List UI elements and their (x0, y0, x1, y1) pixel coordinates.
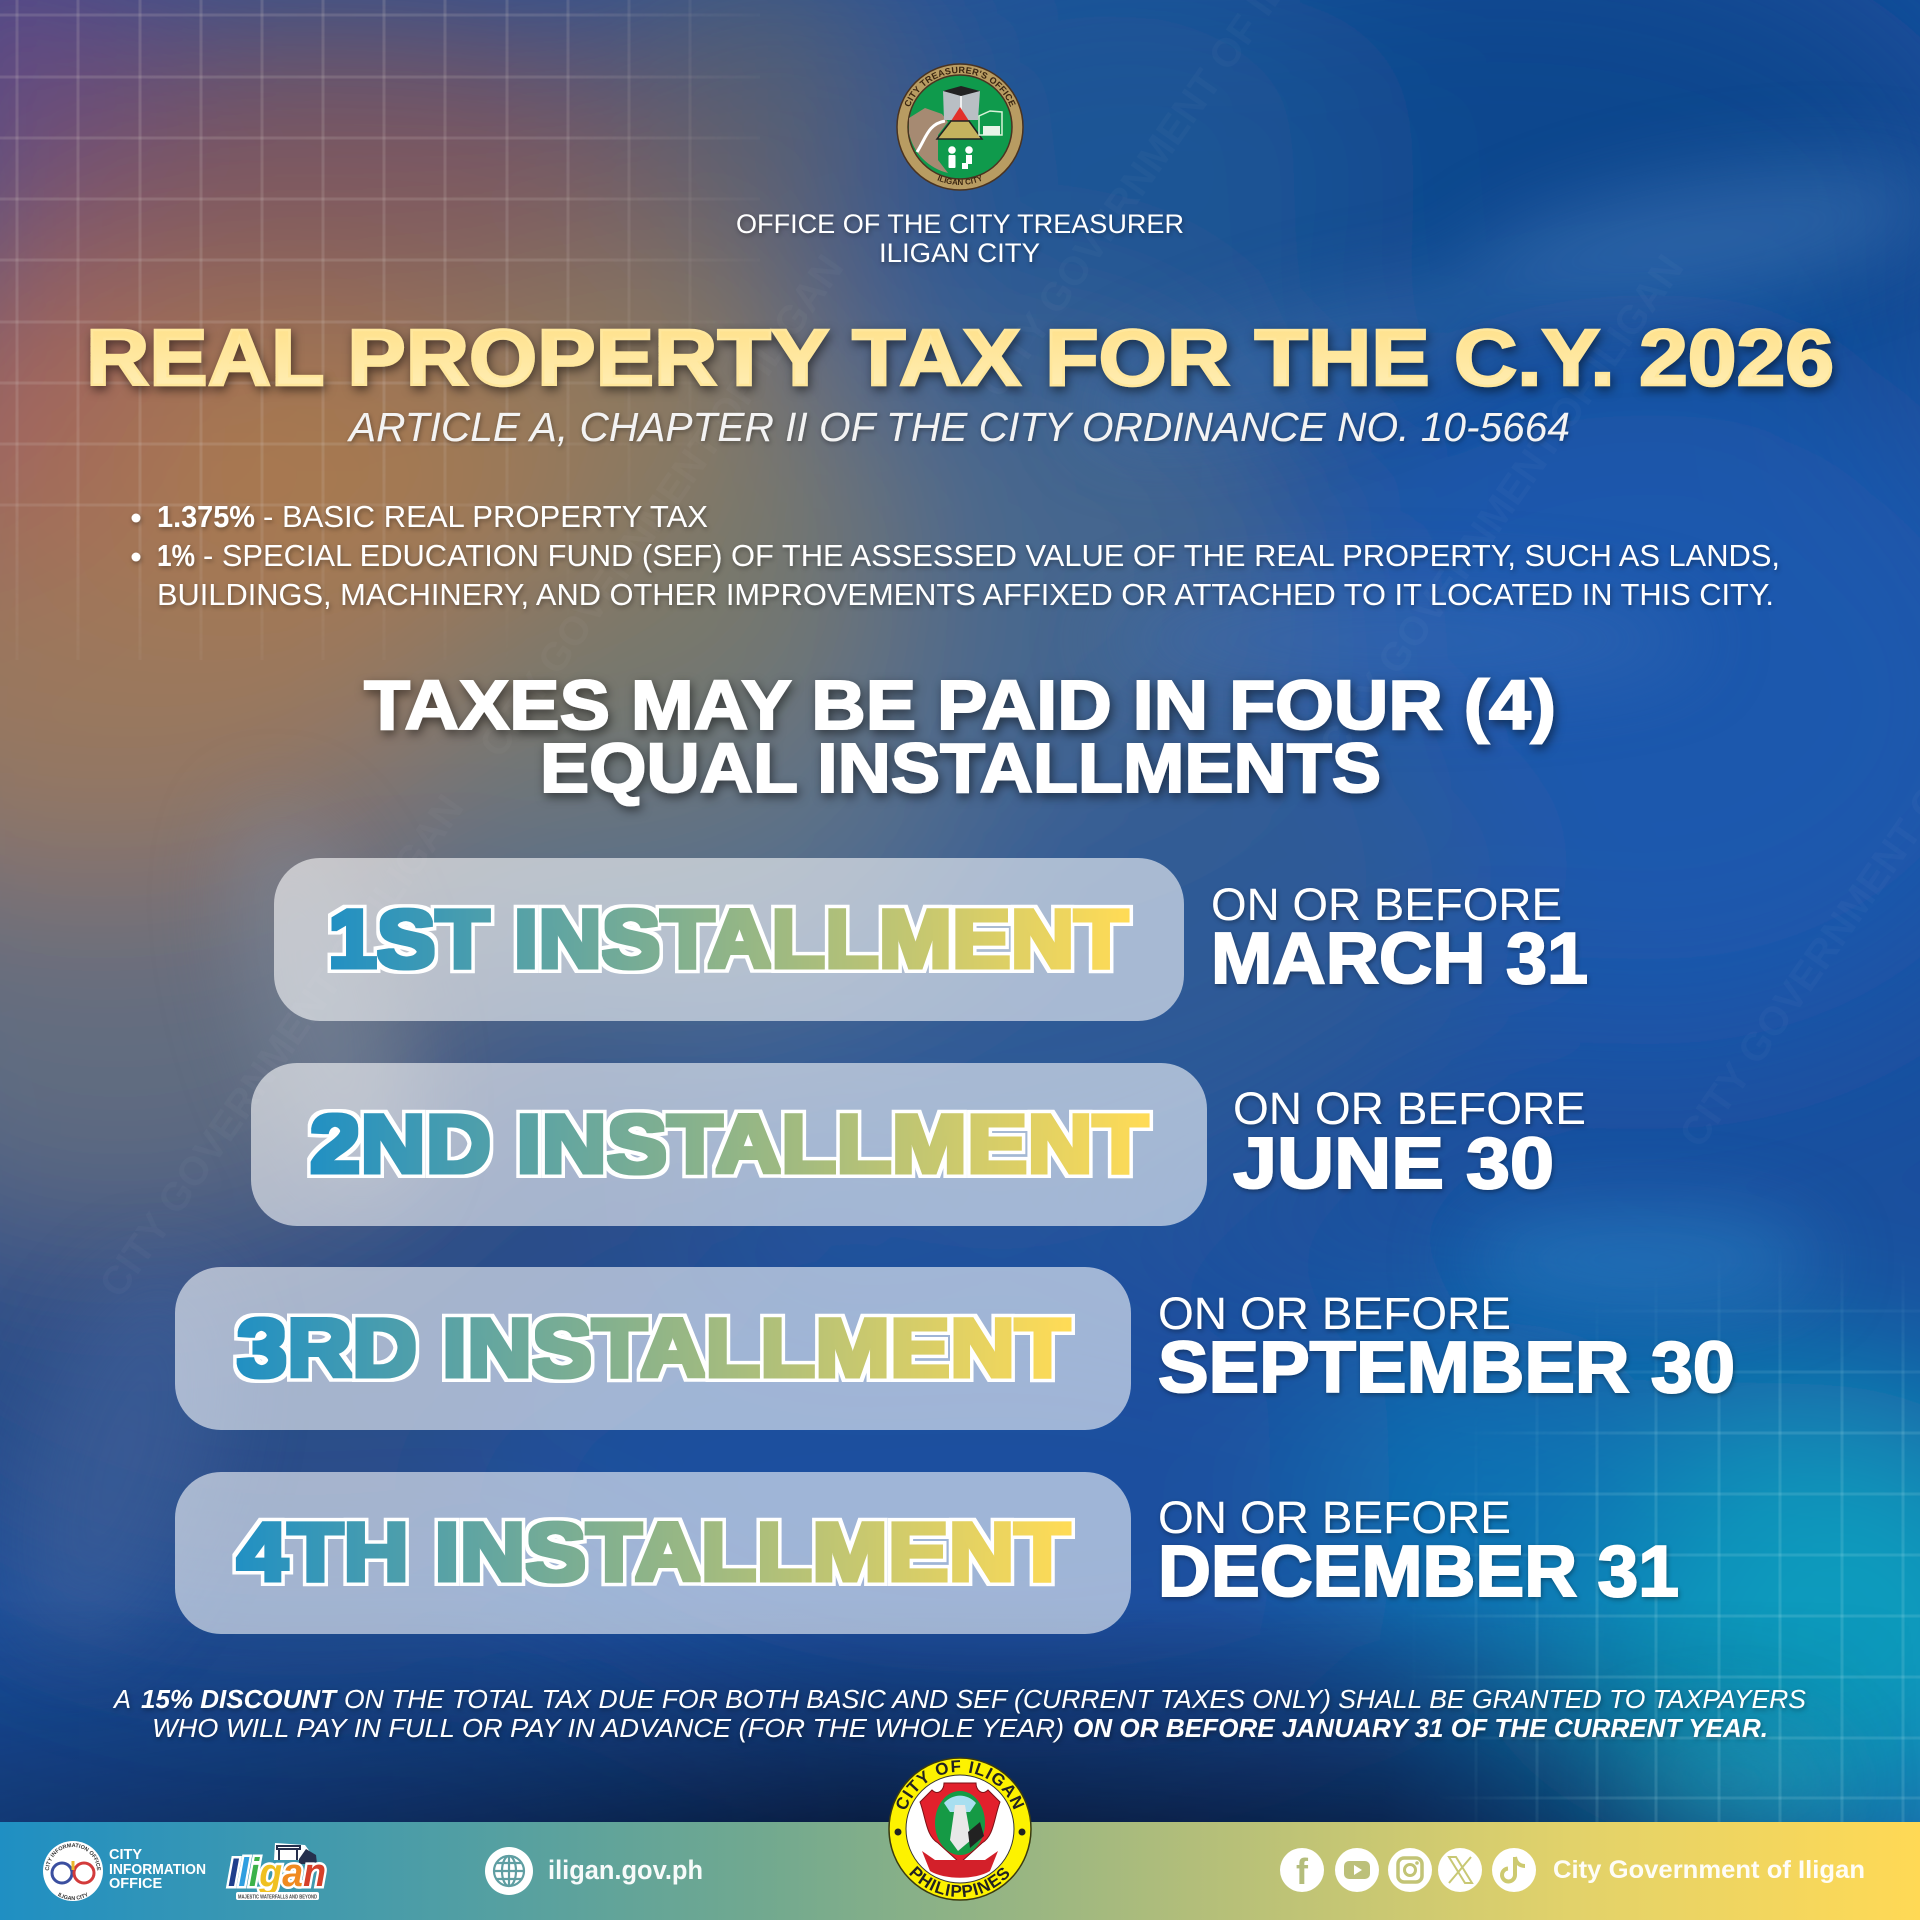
icon: city information office logo: CITY INFORMATION OFFICE (45, 1843, 101, 1870)
date: june 30: JUNE 30 (1233, 1124, 1554, 1204)
bullet list: - BASIC REAL PROPERTY TAX (263, 499, 708, 534)
social label: City Government of Iligan (1553, 1856, 1865, 1884)
city information office label: INFORMATION (109, 1862, 206, 1878)
title: REAL PROPERTY TAX FOR THE C.Y. 2026 (86, 313, 1834, 402)
date: september 30 (1158, 1288, 1735, 1408)
watermark: CITY GOVERNMENT OF ILIGAN (1311, 247, 1692, 765)
icon: city information office logo: ILIGAN CITY (58, 1892, 88, 1900)
bullet list: - SPECIAL EDUCATION FUND (SEF) OF THE ASSESSED VALUE OF THE REAL PROPERTY, SUCH AS LANDS, (203, 538, 1780, 573)
date: march 31: ON OR BEFORE (1211, 879, 1562, 930)
date: december 31: DECEMBER 31 (1158, 1532, 1679, 1612)
panel: 3rd installment (175, 1267, 1131, 1430)
panel: 2nd installment (251, 1063, 1207, 1226)
icon: city information office logo (43, 1841, 103, 1902)
icon: city treasurer seal (896, 63, 1024, 191)
panel: 1st installment: 1ST INSTALLMENT (328, 894, 1128, 985)
city information office label: OFFICE (109, 1876, 162, 1892)
date: june 30 (1233, 1083, 1586, 1204)
icon: x (1438, 1848, 1482, 1892)
discount note: WHO WILL PAY IN FULL OR PAY IN ADVANCE (FOR THE WHOLE YEAR) (152, 1713, 1064, 1743)
icon: facebook (1280, 1848, 1324, 1892)
icon: city treasurer seal: CITY TREASURER'S OFFICE (904, 66, 1016, 107)
grid bottom-right (1458, 1304, 1920, 1822)
date: march 31 (1211, 879, 1588, 999)
date: september 30: SEPTEMBER 30 (1158, 1328, 1735, 1408)
grid top-left (0, 0, 760, 660)
icon: youtube (1335, 1848, 1379, 1892)
installments heading: EQUAL INSTALLMENTS (540, 729, 1381, 807)
bullet list (132, 499, 1780, 612)
city information office label (109, 1847, 206, 1892)
icon: tiktok (1492, 1848, 1536, 1892)
date: june 30: ON OR BEFORE (1233, 1083, 1586, 1134)
office heading: ILIGAN CITY (879, 238, 1040, 268)
date: december 31: ON OR BEFORE (1158, 1492, 1511, 1543)
discount note: ON THE TOTAL TAX DUE FOR BOTH BASIC AND SEF (CURRENT TAXES ONLY) SHALL BE GRANTED TO TAXPAYERS (344, 1684, 1807, 1714)
icon: city of iligan seal: PHILIPPINES (909, 1866, 1010, 1898)
panel: 1st installment (274, 858, 1184, 1021)
website: iligan.gov.ph (548, 1855, 703, 1885)
office heading: OFFICE OF THE CITY TREASURER (736, 209, 1184, 239)
panel: 3rd installment: 3RD INSTALLMENT (237, 1303, 1070, 1394)
subtitle: ARTICLE A, CHAPTER II OF THE CITY ORDINANCE NO. 10-5664 (346, 404, 1570, 450)
icon: instagram (1388, 1848, 1432, 1892)
office heading (736, 209, 1184, 268)
watermark: CITY GOVERNMENT OF ILIGAN (91, 787, 472, 1305)
bullet list: 1% (157, 538, 195, 573)
panel: 4th installment (175, 1472, 1131, 1634)
icon: city of iligan seal (889, 1757, 1031, 1901)
icon: city of iligan seal: CITY OF ILIGAN (896, 1760, 1024, 1810)
icon: iligan brand logo: MAJESTIC WATERFALLS AND BEYOND (238, 1894, 317, 1900)
discount note: 15% DISCOUNT (141, 1684, 338, 1714)
discount note (112, 1684, 1807, 1743)
installments heading: TAXES MAY BE PAID IN FOUR (4) (364, 666, 1556, 744)
date: march 31: MARCH 31 (1211, 919, 1588, 999)
watermark: CITY GOVERNMENT OF ILIGAN (471, 247, 852, 765)
icon: globe (485, 1847, 533, 1895)
discount note: ON OR BEFORE JANUARY 31 OF THE CURRENT YEAR. (1073, 1713, 1768, 1743)
city information office label: CITY (109, 1847, 142, 1863)
date: september 30: ON OR BEFORE (1158, 1288, 1511, 1339)
bullet list: BUILDINGS, MACHINERY, AND OTHER IMPROVEMENTS AFFIXED OR ATTACHED TO IT LOCATED IN THIS CITY. (157, 577, 1774, 612)
discount note: A (112, 1684, 131, 1714)
icon: facebook: f (1296, 1851, 1309, 1892)
icon: iligan brand logo: Iligan (228, 1851, 326, 1895)
panel: 2nd installment: 2ND INSTALLMENT (310, 1099, 1148, 1190)
watermark (91, 0, 1920, 1305)
footer band (0, 1822, 1920, 1920)
installments heading (364, 666, 1556, 807)
bullet list: 1.375% (157, 499, 255, 534)
panel: 4th installment: 4TH INSTALLMENT (237, 1507, 1070, 1598)
date: december 31 (1158, 1492, 1679, 1612)
icon: city treasurer seal: ILIGAN CITY (937, 175, 982, 185)
